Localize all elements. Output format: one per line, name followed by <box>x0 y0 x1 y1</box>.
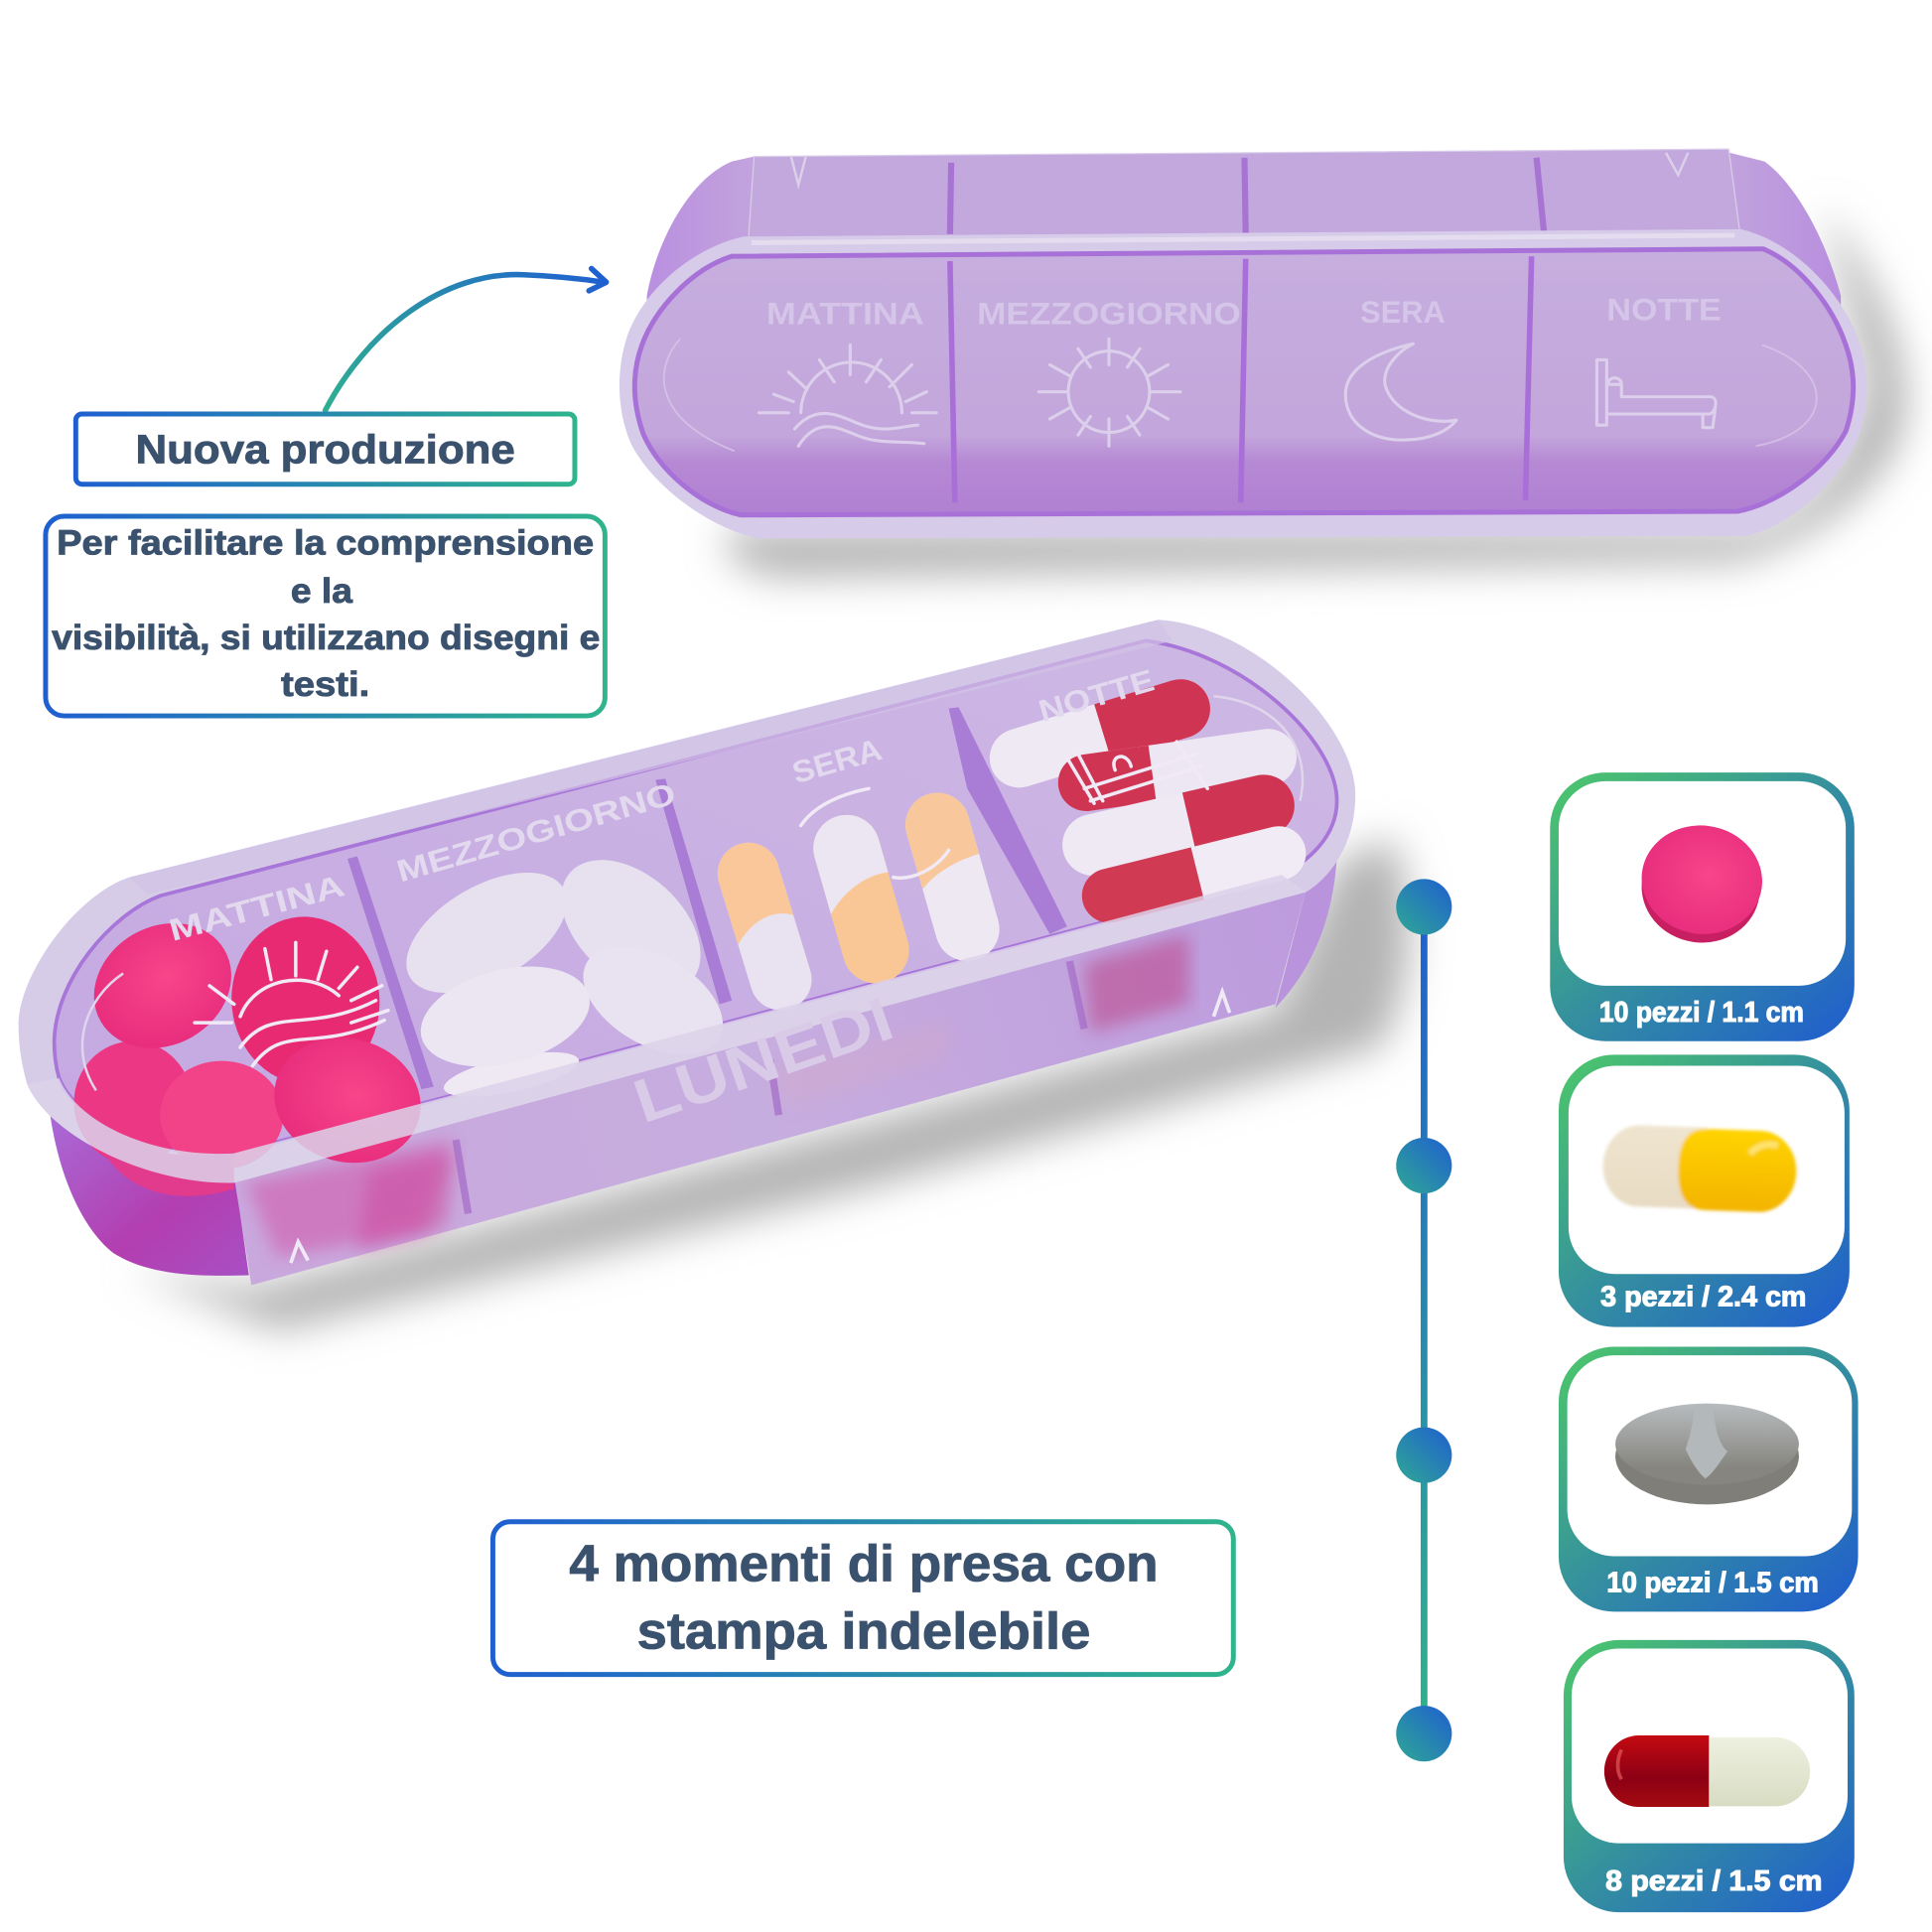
labels on open lid <box>166 663 1158 948</box>
text box: 4 momenti <box>492 1522 1233 1675</box>
icon: yellow capsule <box>1601 1124 1798 1213</box>
MEZZOGIORNO: MEZZOGIORNO <box>977 296 1241 331</box>
MATTINA: MATTINA <box>166 868 348 948</box>
lid outer <box>620 229 1867 538</box>
end ribs <box>82 696 1303 1090</box>
front panel <box>234 890 1307 1285</box>
timeline <box>1396 879 1451 1761</box>
pill box open with pills (left) <box>19 620 1410 1330</box>
interior floor <box>55 640 1337 1154</box>
right body <box>1276 857 1337 1008</box>
timeline dot 1 <box>1396 879 1451 934</box>
icon: moon open lid <box>801 788 949 878</box>
text box: description: testi. <box>281 666 369 704</box>
hinge clips open box <box>291 992 1230 1263</box>
card: red capsule: 8 pezzi / 1.5 cm <box>1605 1865 1823 1897</box>
NOTTE: NOTTE <box>1035 663 1158 729</box>
icon: bed open lid <box>1067 742 1207 803</box>
lid inner <box>634 249 1854 515</box>
text box: description: visibilità, si utilizzano disegni e <box>52 620 600 657</box>
icon: sunrise open lid <box>195 942 388 1066</box>
text box: description: Per facilitare la comprensione <box>57 524 594 562</box>
front reflections <box>246 934 1189 1257</box>
card: grey tablet: 10 pezzi / 1.5 cm <box>1606 1567 1819 1598</box>
heading box: Nuova produzione <box>75 414 575 484</box>
timeline dot 2 <box>1396 1138 1451 1193</box>
card: yellow capsule: 3 pezzi / 2.4 cm <box>1600 1282 1806 1313</box>
dividers <box>347 707 1067 1089</box>
icon: moon <box>1345 344 1456 440</box>
text box: description <box>46 516 605 716</box>
lid rim <box>19 620 1355 1183</box>
MATTINA: MATTINA <box>766 296 924 331</box>
timeline dot 4 <box>1396 1706 1451 1761</box>
back of box <box>647 153 1841 382</box>
compartment labels <box>766 293 1722 331</box>
icon: sunrise <box>759 345 936 446</box>
pills: orange capsules <box>710 785 1007 1018</box>
pill box closed (top right) <box>620 149 1906 577</box>
NOTTE: NOTTE <box>1606 293 1722 328</box>
lid top strip <box>752 235 1734 242</box>
icon: sun <box>1038 339 1180 446</box>
lid end ribs <box>664 339 1817 451</box>
text box: 4 momenti: 4 momenti di presa con <box>569 1535 1159 1592</box>
shadow of open box <box>129 838 1410 1330</box>
left body <box>50 1109 249 1276</box>
icon: bed <box>1596 359 1716 428</box>
front lid band <box>27 875 1307 1183</box>
hinge clips <box>791 153 1688 185</box>
card: pink tablet <box>1550 772 1855 1041</box>
heading box: Nuova produzione: Nuova produzione <box>136 427 515 473</box>
icon: pink tablet <box>1633 818 1769 950</box>
pills: pink tablets <box>71 898 435 1196</box>
lid dividers <box>950 256 1532 502</box>
card: yellow capsule <box>1559 1054 1850 1327</box>
pills: white tablets <box>386 834 742 1106</box>
SERA: SERA <box>1360 295 1446 330</box>
arrow <box>326 269 607 410</box>
pills: red capsules <box>982 672 1311 928</box>
shadow of closed box <box>726 209 1906 577</box>
card: grey tablet <box>1559 1346 1859 1611</box>
text box: 4 momenti: stampa indelebile <box>637 1603 1090 1661</box>
icon: grey tablet <box>1615 1404 1799 1504</box>
card: pink tablet: 10 pezzi / 1.1 cm <box>1599 997 1804 1029</box>
timeline dot 3 <box>1396 1428 1451 1483</box>
icon: red capsule <box>1604 1735 1810 1807</box>
hinge strip <box>129 620 1173 895</box>
SERA: SERA <box>788 732 886 790</box>
card: red capsule <box>1564 1640 1855 1912</box>
text box: description: e la <box>291 573 353 611</box>
hinge dividers <box>950 158 1544 234</box>
LUNEDI print: LUNEDI <box>625 985 901 1137</box>
MEZZOGIORNO: MEZZOGIORNO <box>393 776 679 889</box>
hinge panel <box>748 149 1739 246</box>
